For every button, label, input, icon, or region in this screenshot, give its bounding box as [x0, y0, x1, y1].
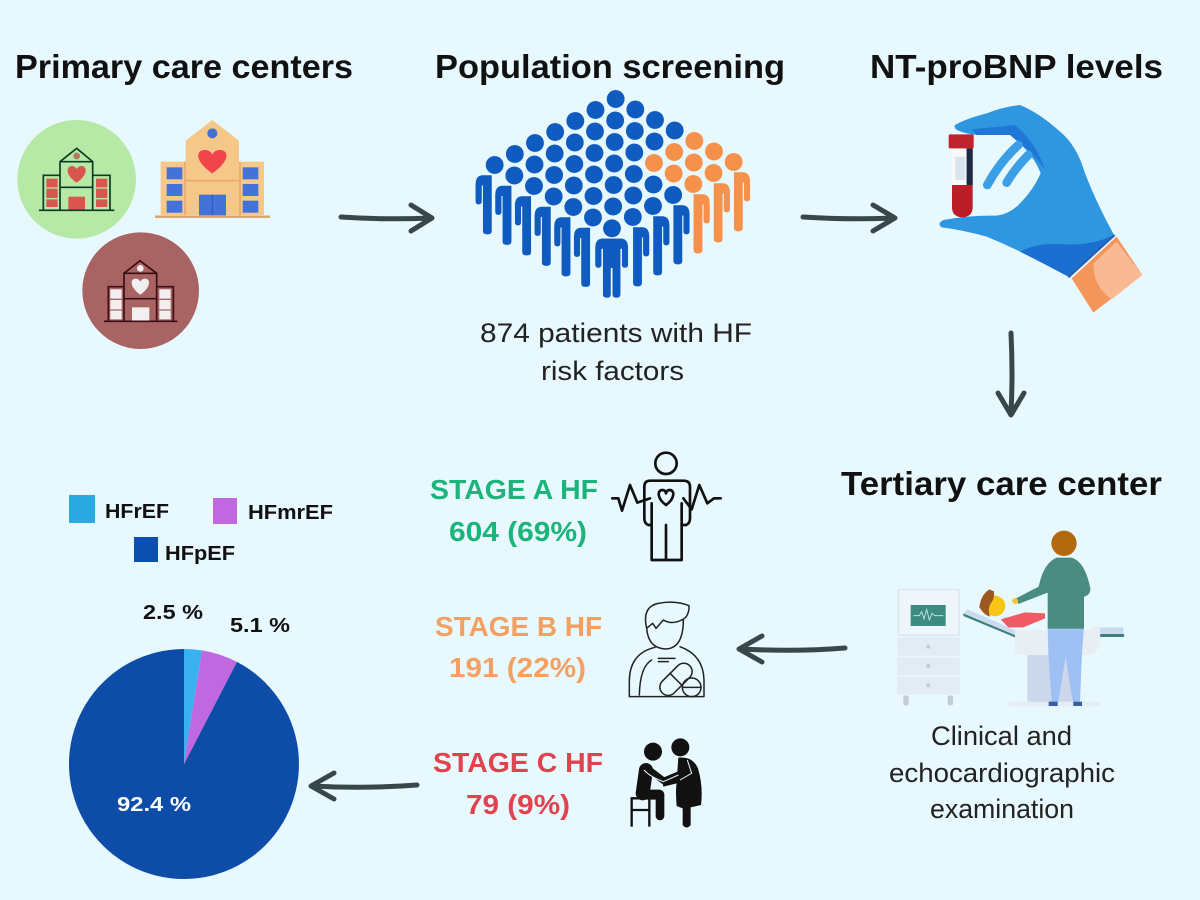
label: stage A HF [430, 474, 598, 547]
arrow: primary care to screening [341, 205, 432, 231]
label: stage B HF: STAGE B HF [435, 611, 602, 642]
legend item: HFrEF [69, 495, 169, 523]
legend [69, 495, 333, 565]
caption: patients with HF risk factors: 874 patients with HF [480, 318, 752, 348]
legend item: HFmrEF: HFmrEF [248, 502, 333, 524]
icon: clinician examining patient [897, 531, 1124, 706]
icon: green circle hospital [17, 120, 136, 239]
caption: clinical and echocardiographic examination: examination [930, 794, 1074, 824]
icon: orange hospital [155, 120, 270, 217]
label: stage B HF [435, 611, 602, 683]
label: stage C HF: STAGE C HF [433, 747, 603, 778]
pie chart: HF phenotypes: 2.5 % [143, 602, 203, 624]
exam bed [963, 609, 1124, 706]
label: stage A HF: STAGE A HF [430, 474, 598, 505]
legend item: HFpEF: HFpEF [165, 543, 235, 565]
heading: Population screening: Population screening [435, 48, 785, 85]
icon: doctor examining seated patient [632, 738, 702, 827]
patient [979, 589, 1045, 627]
arrow: screening to NT-proBNP [803, 205, 895, 231]
glove [940, 105, 1114, 277]
arrow: tertiary centre to stages [739, 636, 845, 662]
sleeve [1072, 237, 1142, 313]
arrow: NT-proBNP to tertiary centre [998, 333, 1024, 415]
clinician [1012, 531, 1090, 706]
label: stage C HF [433, 747, 603, 820]
echo cart [897, 590, 960, 705]
label: stage B HF: 191 (22%) [449, 652, 586, 683]
label: stage C HF: 79 (9%) [466, 789, 570, 820]
pie chart: HF phenotypes [69, 602, 299, 879]
heading: Tertiary care center: Tertiary care center [841, 465, 1162, 502]
icon: gloved hand holding blood tube [940, 105, 1142, 313]
legend item: HFmrEF [213, 498, 333, 524]
icon: primary care hospitals [17, 120, 270, 349]
caption: patients with HF risk factors [480, 318, 752, 386]
pie chart: HF phenotypes: 5.1 % [230, 615, 290, 637]
caption: clinical and echocardiographic examination: Clinical and [931, 721, 1072, 751]
pie chart: HF phenotypes: 92.4 % [117, 794, 191, 816]
blood tube [952, 148, 973, 217]
icon: patient with pills [629, 602, 704, 699]
heading: Primary care centers: Primary care centers [15, 48, 353, 85]
icon: person with heartbeat [612, 453, 721, 560]
arrow: stage C to pie chart [311, 773, 417, 799]
caption: patients with HF risk factors: risk factors [541, 356, 684, 386]
legend item: HFpEF [134, 537, 235, 565]
heading: NT-proBNP levels: NT-proBNP levels [870, 48, 1163, 85]
label: stage A HF: 604 (69%) [449, 516, 587, 547]
legend item: HFrEF: HFrEF [105, 501, 169, 523]
icon: brown circle hospital [82, 232, 199, 349]
caption: clinical and echocardiographic examination [889, 721, 1115, 824]
icon: population of people [475, 90, 750, 298]
caption: clinical and echocardiographic examination: echocardiographic [889, 758, 1115, 788]
